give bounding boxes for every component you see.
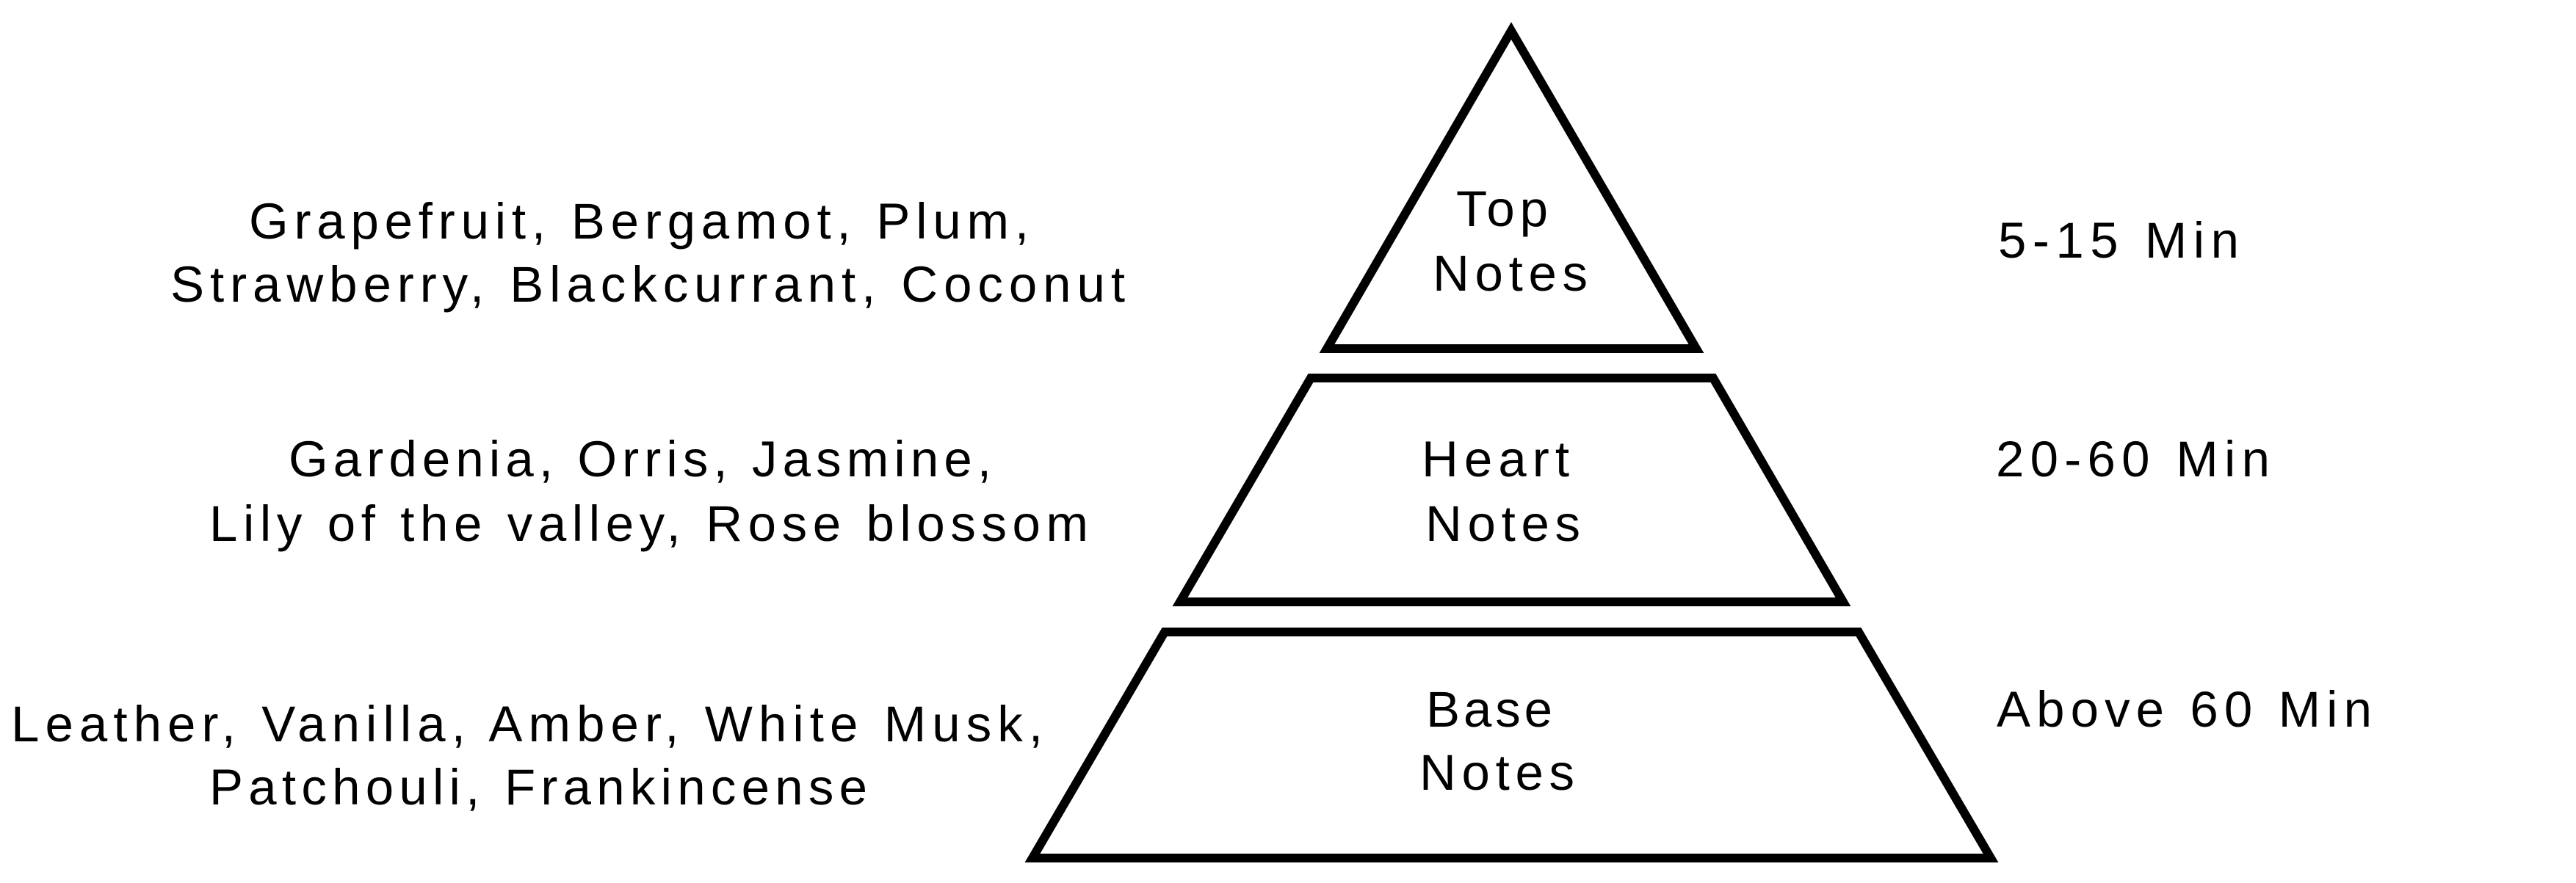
duration: heart notes: 20-60 Min bbox=[1996, 431, 2270, 487]
label: top notes: Notes bbox=[1433, 245, 1588, 302]
label: base notes: Notes bbox=[1419, 744, 1574, 801]
label: top notes: Top bbox=[1456, 181, 1548, 237]
ingredients: base notes: Patchouli, Frankincense bbox=[209, 759, 867, 815]
label: heart notes: Notes bbox=[1425, 495, 1580, 552]
duration: top notes: 5-15 Min bbox=[1998, 212, 2239, 269]
pyramid tier: base trapezoid bbox=[1032, 632, 1991, 858]
ingredients: top notes bbox=[170, 193, 1125, 313]
label: heart notes bbox=[1422, 431, 1580, 552]
panel: top notes tier bbox=[170, 31, 2239, 349]
ingredients: base notes: Leather, Vanilla, Amber, White Musk, bbox=[11, 696, 1043, 752]
ingredients: base notes bbox=[11, 696, 1043, 815]
panel: base notes tier bbox=[11, 632, 2372, 858]
ingredients: heart notes: Gardenia, Orris, Jasmine, bbox=[289, 431, 991, 487]
duration: base notes: Above 60 Min bbox=[1997, 681, 2372, 738]
label: heart notes: Heart bbox=[1422, 431, 1569, 487]
pyramid tier: top triangle bbox=[1327, 31, 1696, 349]
label: base notes bbox=[1419, 681, 1574, 801]
label: top notes bbox=[1433, 181, 1588, 302]
ingredients: heart notes bbox=[209, 431, 1088, 552]
label: base notes: Base bbox=[1426, 681, 1552, 738]
ingredients: top notes: Strawberry, Blackcurrant, Coconut bbox=[170, 256, 1125, 313]
pyramid tier: heart trapezoid bbox=[1180, 378, 1843, 602]
ingredients: top notes: Grapefruit, Bergamot, Plum, bbox=[249, 193, 1029, 250]
panel: heart notes tier bbox=[209, 378, 2270, 602]
ingredients: heart notes: Lily of the valley, Rose blossom bbox=[209, 495, 1088, 552]
